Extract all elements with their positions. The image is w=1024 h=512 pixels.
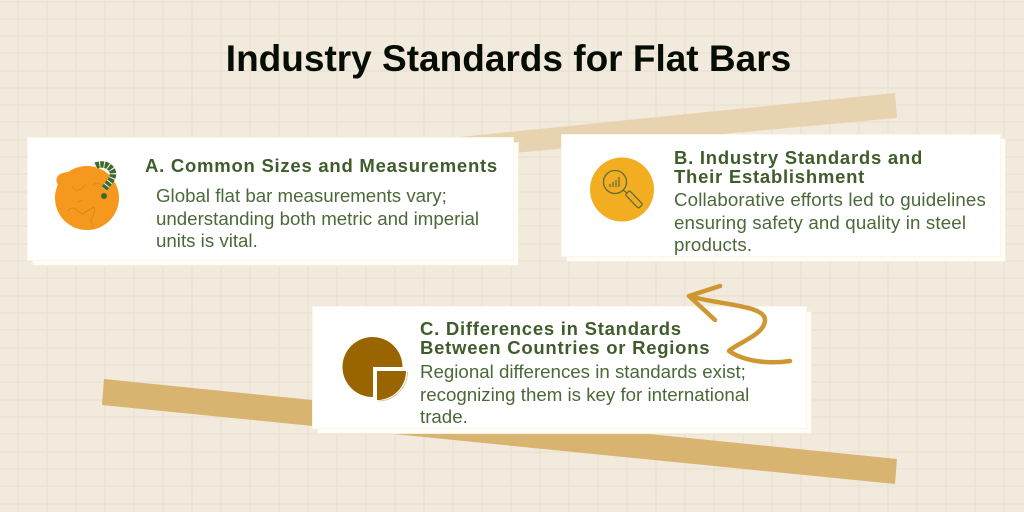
heading C: C. Differences in Standards — [420, 318, 682, 339]
title: Industry Standards for Flat Bars — [226, 38, 791, 79]
tan tape strip, lower — [102, 379, 897, 484]
body C — [420, 361, 749, 427]
body C: recognizing them is key for international — [420, 384, 749, 404]
body B: products. — [674, 234, 752, 255]
body C: trade. — [420, 406, 468, 427]
beige tape strip, upper — [460, 93, 897, 152]
body B — [674, 189, 986, 255]
heading A: A. Common Sizes and Measurements — [145, 155, 498, 176]
heading B: B. Industry Standards and — [674, 147, 923, 168]
body C: Regional differences in standards exist; — [420, 361, 746, 382]
heading B — [674, 147, 923, 187]
body B: ensuring safety and quality in steel — [674, 212, 966, 232]
heading C — [420, 318, 710, 358]
icon: thinking face with question mark — [55, 161, 119, 230]
body A: understanding both metric and imperial — [156, 208, 479, 228]
body A — [156, 185, 479, 251]
body A: Global flat bar measurements vary; — [156, 185, 447, 206]
body B: Collaborative efforts led to guidelines — [674, 189, 986, 210]
panel: C. differences — [312, 306, 812, 434]
heading B: Their Establishment — [674, 166, 865, 187]
arrow: curved hand-drawn arrow — [686, 284, 792, 364]
panel: B. industry standards — [561, 134, 1006, 262]
icon: pie chart — [342, 337, 408, 402]
panel: A. common sizes — [27, 137, 519, 266]
heading C: Between Countries or Regions — [420, 337, 710, 358]
body A: units is vital. — [156, 230, 258, 251]
icon: magnifier over bar chart — [590, 158, 654, 222]
